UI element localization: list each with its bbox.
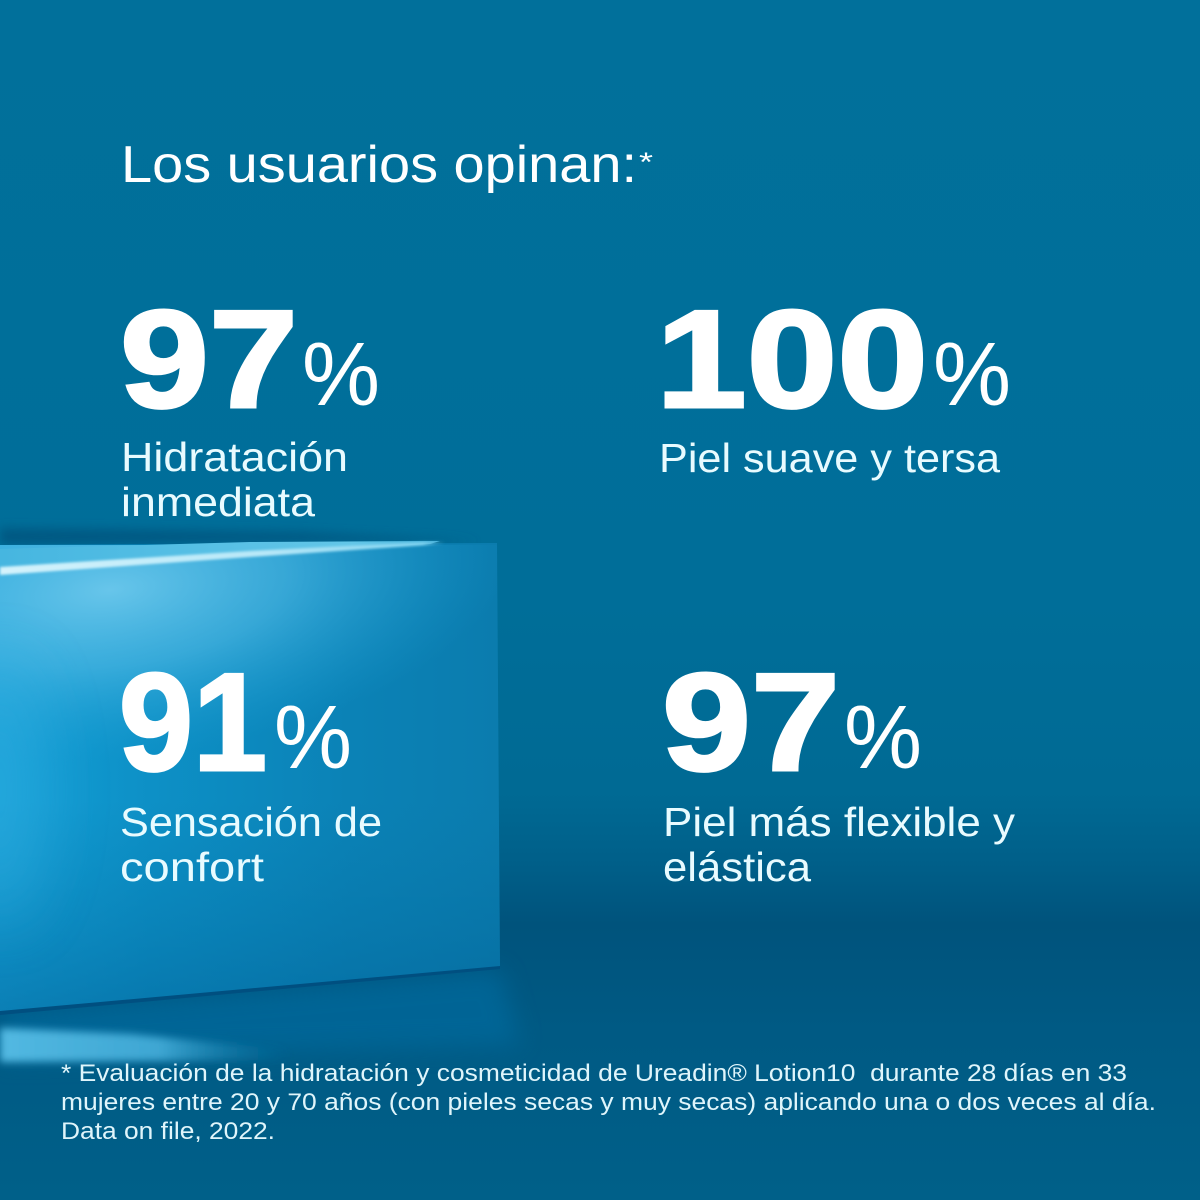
- stat: 97% hidratación inmediata: %: [302, 325, 380, 425]
- bottom contact line: [0, 966, 500, 1015]
- stat: 97% hidratación inmediata: [120, 282, 380, 525]
- block shadow above top edge: [0, 528, 480, 545]
- title asterisk: *: [639, 147, 654, 177]
- stat: 100% piel suave y tersa: 100: [656, 282, 928, 437]
- top-left glow on block: [0, 545, 438, 890]
- block face shading: [0, 543, 500, 1012]
- stat: 91% sensación de confort: confort: [120, 844, 265, 890]
- stat: 97% piel más flexible y elástica: 97: [662, 645, 840, 800]
- stat: 100% piel suave y tersa: Piel suave y tersa: [659, 435, 1000, 481]
- stat: 100% piel suave y tersa: %: [933, 325, 1011, 425]
- stat: 100% piel suave y tersa: [656, 282, 1011, 481]
- stat: 91% sensación de confort: 91: [119, 645, 267, 800]
- stat: 97% piel más flexible y elástica: Piel más flexible y: [663, 799, 1016, 845]
- floor reflection: [0, 970, 520, 1062]
- top face: [0, 541, 440, 570]
- stat: 91% sensación de confort: [119, 645, 382, 890]
- stat: 97% hidratación inmediata: Hidratación: [121, 434, 348, 480]
- stat: 97% piel más flexible y elástica: %: [844, 688, 922, 788]
- footnote: Data on file, 2022.: [61, 1118, 275, 1145]
- podium: illuminated blue block: [0, 528, 520, 1062]
- stat: 91% sensación de confort: Sensación de: [120, 799, 382, 845]
- stat: 97% piel más flexible y elástica: elástica: [663, 844, 811, 890]
- footnote: [61, 1060, 1156, 1145]
- block front face: [0, 543, 500, 1012]
- stat: 97% hidratación inmediata: inmediata: [121, 479, 315, 525]
- footnote: * Evaluación de la hidratación y cosmeticidad de Ureadin® Lotion10 durante 28 días en 33: [61, 1060, 1127, 1087]
- title: Los usuarios opinan:: [121, 136, 637, 194]
- lit top edge: [0, 541, 445, 575]
- stat: 91% sensación de confort: %: [274, 688, 352, 788]
- footnote: mujeres entre 20 y 70 años (con pieles secas y muy secas) aplicando una o dos veces al día.: [61, 1089, 1156, 1116]
- stat: 97% piel más flexible y elástica: [662, 645, 1016, 890]
- stat: 97% hidratación inmediata: 97: [120, 282, 298, 437]
